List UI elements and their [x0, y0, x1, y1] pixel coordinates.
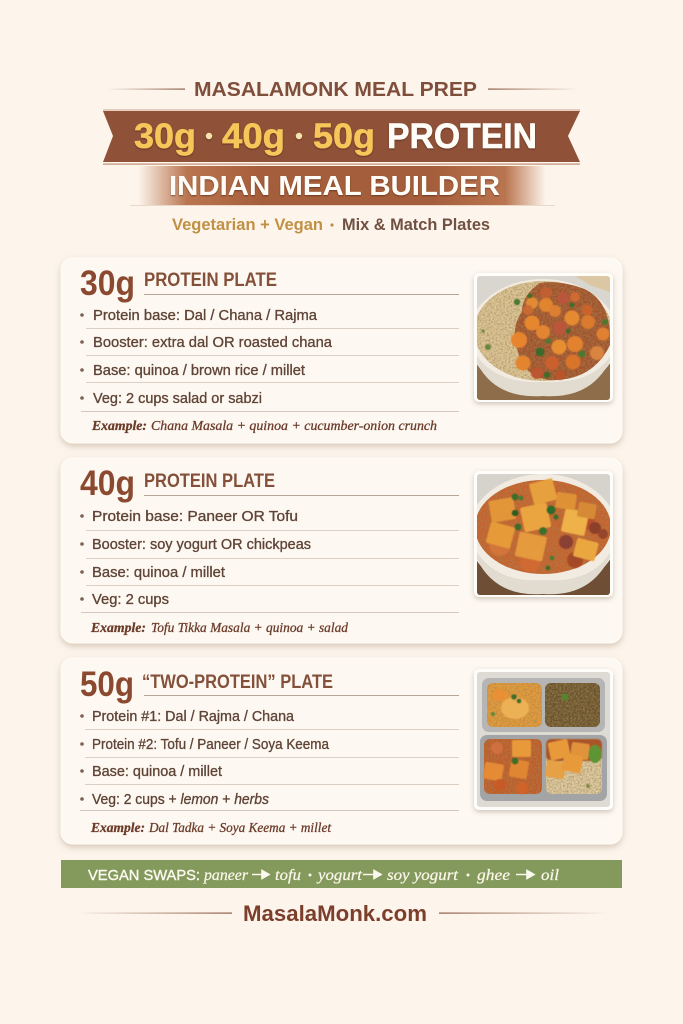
40g example: Tofu Tikka Masala + quinoa + salad	[151, 621, 349, 636]
title ribbon: 30g 40g 50g protein: 40g	[222, 117, 285, 156]
30g ingredient list: Booster: extra dal OR roasted chana	[93, 335, 333, 351]
30g ingredient list: Base: quinoa / brown rice / millet	[93, 363, 305, 379]
50g example: Dal Tadka + Soya Keema + millet	[148, 821, 332, 836]
30g heading	[80, 264, 459, 303]
title ribbon: 30g 40g 50g protein: PROTEIN	[387, 117, 537, 156]
30g example: Chana Masala + quinoa + cucumber-onion crunch	[151, 419, 437, 434]
40g ingredient list: Protein base: Paneer OR Tofu	[92, 509, 298, 525]
vegan swaps band: yogurt	[316, 867, 363, 884]
vegan swaps band	[61, 860, 622, 888]
vegan swaps band: ghee	[477, 867, 510, 884]
photo: chana masala with quinoa	[468, 273, 618, 402]
50g ingredient list: Protein #1: Dal / Rajma / Chana	[92, 709, 295, 725]
tagline	[172, 216, 490, 234]
30g ingredient list: Veg: 2 cups salad or sabzi	[93, 391, 262, 407]
40g example: Example:	[90, 621, 146, 636]
30g heading: 30g	[80, 264, 135, 303]
panel: 50g two-protein plate	[61, 658, 622, 844]
50g ingredient list: Protein #2: Tofu / Paneer / Soya Keema	[92, 737, 330, 753]
title ribbon: 30g 40g 50g protein: 50g	[313, 117, 375, 156]
50g ingredient list	[80, 709, 459, 811]
40g ingredient list: Veg: 2 cups	[92, 592, 169, 608]
40g ingredient list	[80, 509, 459, 613]
subtitle band: Indian Meal Builder	[130, 166, 555, 206]
subtitle band: Indian Meal Builder: INDIAN MEAL BUILDER	[169, 170, 500, 201]
50g ingredient list: Veg: 2 cups + lemon + herbs	[92, 792, 269, 808]
40g ingredient list: Base: quinoa / millet	[92, 565, 225, 581]
30g heading: PROTEIN PLATE	[144, 270, 277, 291]
40g ingredient list: Booster: soy yogurt OR chickpeas	[92, 537, 311, 553]
vegan swaps band: VEGAN SWAPS:	[88, 867, 200, 884]
footer: MasalaMonk.com: MasalaMonk.com	[243, 901, 427, 926]
panel: 40g protein plate	[61, 458, 622, 643]
vegan swaps band: tofu	[275, 867, 301, 884]
photo: tofu tikka masala	[468, 471, 618, 597]
panel: 30g protein plate	[61, 258, 622, 443]
40g heading: 40g	[80, 464, 135, 503]
50g ingredient list: Base: quinoa / millet	[92, 764, 222, 780]
30g ingredient list: Protein base: Dal / Chana / Rajma	[93, 308, 318, 324]
30g ingredient list	[80, 308, 459, 412]
arrow: paneer to tofu	[252, 870, 269, 878]
vegan swaps band: paneer	[203, 867, 249, 884]
vegan swaps band: soy yogurt	[387, 867, 459, 884]
40g heading: PROTEIN PLATE	[144, 471, 275, 492]
tagline: Mix & Match Plates	[342, 216, 490, 234]
photo: meal prep trays	[474, 669, 613, 810]
50g heading: 50g	[80, 665, 134, 704]
title ribbon: 30g 40g 50g protein: 30g	[134, 117, 196, 156]
title ribbon: 30g 40g 50g protein	[103, 110, 580, 165]
50g heading	[80, 665, 459, 704]
50g example: Example:	[90, 821, 145, 836]
arrow: yogurt to soy yogurt	[363, 870, 381, 878]
arrow: ghee to oil	[516, 870, 534, 878]
vegan swaps band: oil	[541, 867, 560, 884]
tagline: Vegetarian + Vegan	[172, 216, 323, 234]
50g heading: “TWO-PROTEIN” PLATE	[142, 672, 333, 693]
header eyebrow: MasalaMonk Meal Prep: MASALAMONK MEAL PREP	[194, 79, 477, 101]
40g heading	[80, 464, 459, 503]
30g example: Example:	[91, 419, 147, 434]
